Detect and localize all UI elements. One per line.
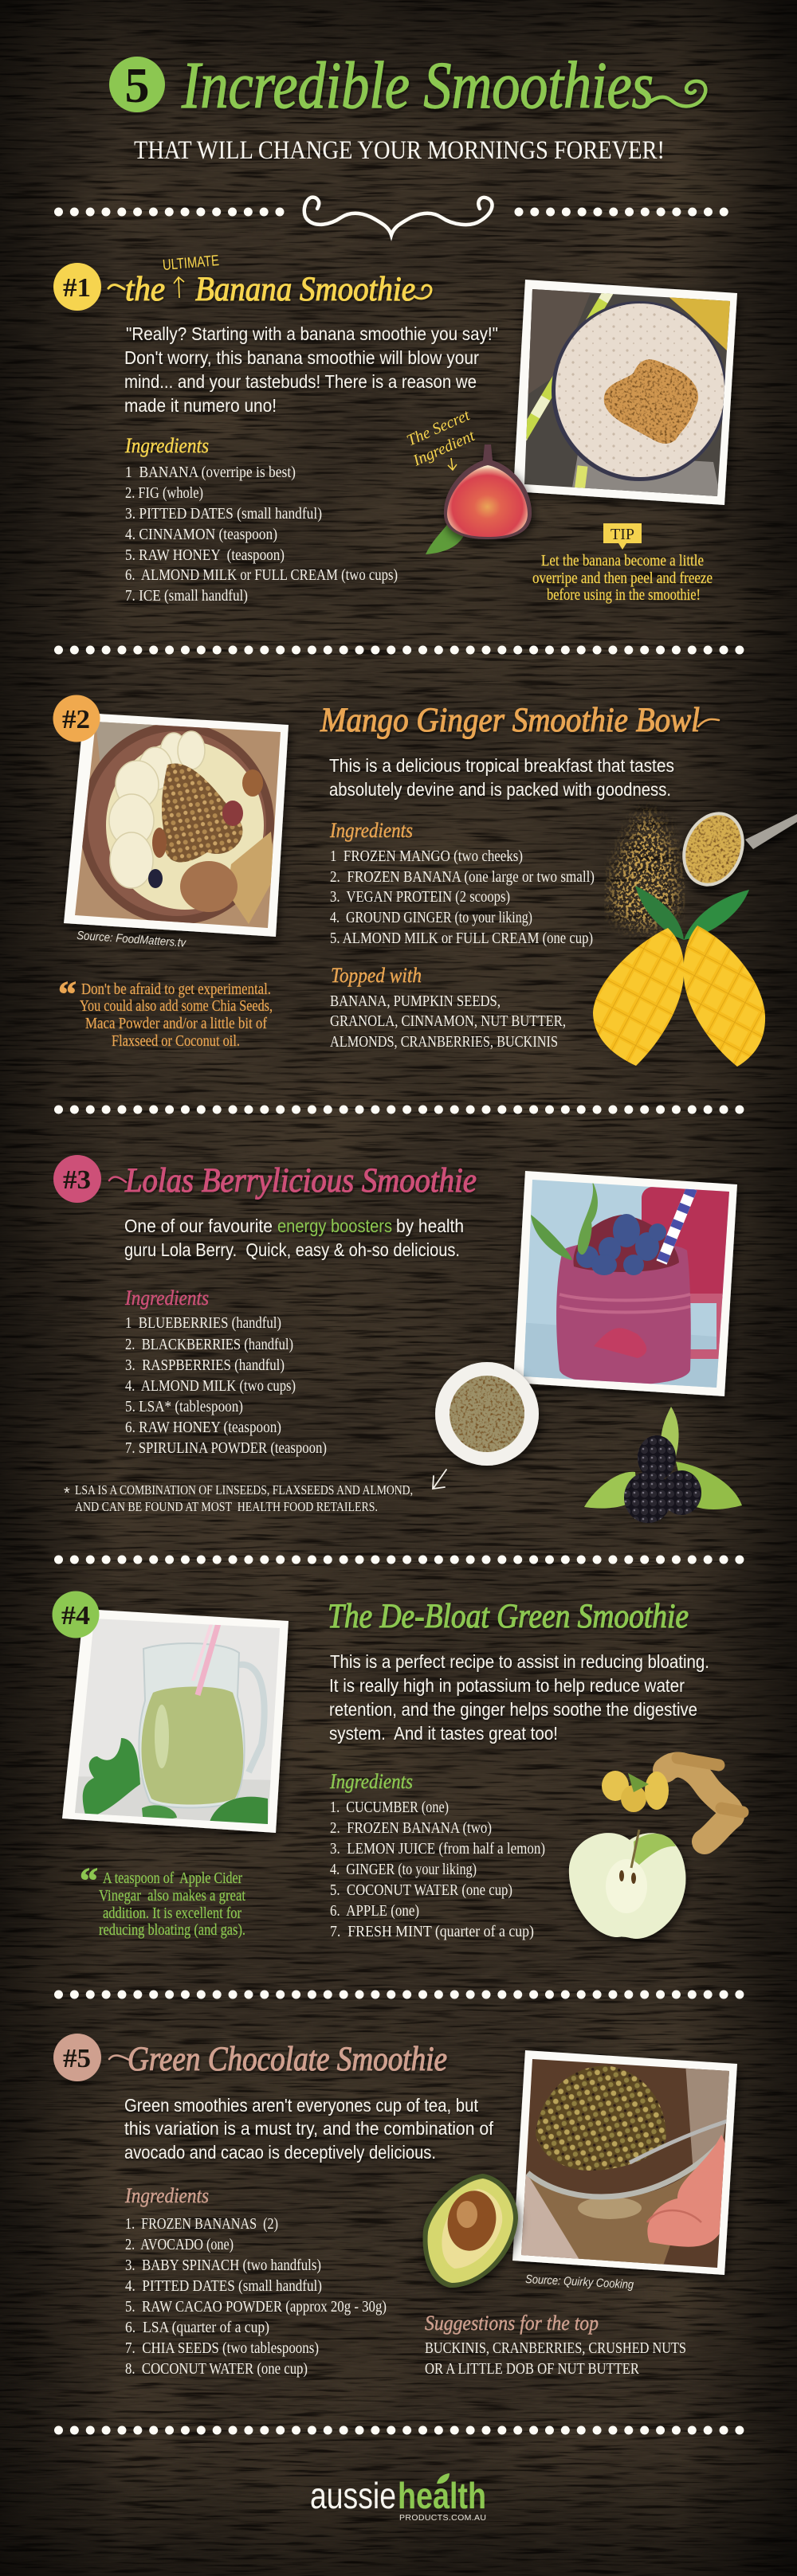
- photo source: Source: FoodMatters.tv: [77, 929, 187, 950]
- ingredients list: 3. BABY SPINACH (two handfuls): [125, 2257, 321, 2274]
- icon: avocado half: [423, 2174, 518, 2288]
- LSA footnote: *: [64, 1485, 70, 1502]
- ingredients list: 4. GINGER (to your liking): [330, 1861, 477, 1878]
- ingredients list: 2. FROZEN BANANA (one large or two small): [330, 868, 595, 886]
- ingredients heading: Ingredients: [124, 2184, 209, 2207]
- suggestions heading: Suggestions for the top: [425, 2312, 599, 2335]
- logo: aussie health products: aussie: [310, 2475, 396, 2516]
- icon: spoon of ginger powder: [672, 803, 797, 895]
- quote tip: “: [58, 973, 77, 1014]
- number badge 5: #5: [63, 2044, 91, 2073]
- ingredients list: 4. CINNAMON (teaspoon): [125, 526, 277, 543]
- toppings list: [330, 992, 566, 1051]
- logo: aussie health products: health: [398, 2475, 486, 2516]
- intro text: [124, 2095, 494, 2163]
- LSA footnote: LSA IS A COMBINATION OF LINSEEDS, FLAXSEEDS AND ALMOND,: [75, 1482, 413, 1497]
- ingredients list: 3. LEMON JUICE (from half a lemon): [330, 1840, 545, 1858]
- quote tip: You could also add some Chia Seeds,: [80, 997, 273, 1015]
- panel: smoothie 1 banana: [53, 253, 737, 605]
- tip text: Let the banana become a little: [541, 552, 704, 570]
- panel: smoothie 4 green: [53, 1591, 743, 1940]
- number badge 5: [53, 2034, 101, 2081]
- ingredients heading: Ingredients: [329, 1770, 413, 1793]
- number badge 1: #1: [63, 273, 91, 303]
- ingredients list: 1. FROZEN BANANAS (2): [125, 2215, 278, 2233]
- photo source: Source: Quirky Cooking: [525, 2273, 634, 2292]
- number badge 2: [53, 695, 100, 742]
- ingredients list: 5. LSA* (tablespoon): [125, 1398, 243, 1415]
- heading berry: Lolas Berrylicious Smoothie: [124, 1162, 477, 1200]
- ingredients list: 3. VEGAN PROTEIN (2 scoops): [330, 888, 510, 906]
- suggestions text: BUCKINIS, CRANBERRIES, CRUSHED NUTS: [425, 2339, 686, 2357]
- ingredients list: 1. CUCUMBER (one): [330, 1799, 449, 1816]
- icon: apple half: [569, 1830, 685, 1939]
- icon: ginger root and slices: [602, 1758, 743, 1842]
- ingredients list: 8. COCONUT WATER (one cup): [125, 2360, 308, 2378]
- intro text: Green smoothies aren't everyones cup of tea, but: [124, 2095, 479, 2116]
- topped with heading: Topped with: [331, 964, 422, 987]
- ingredients list: [125, 464, 398, 605]
- icon: bowl of LSA: [435, 1362, 539, 1466]
- intro text: [124, 1216, 464, 1260]
- heading banana smoothie: Banana Smoothie: [195, 271, 415, 308]
- intro text: guru Lola Berry. Quick, easy & oh-so delicious.: [124, 1239, 460, 1260]
- ingredients list: [330, 848, 595, 947]
- number badge 5: [109, 57, 165, 113]
- heading chocolate smoothie: Green Chocolate Smoothie: [128, 2041, 447, 2078]
- tip text: before using in the smoothie!: [547, 586, 701, 604]
- quote tip: Maca Powder and/or a little bit of: [85, 1015, 267, 1032]
- number badge 1: [53, 263, 101, 311]
- intro text: One of our favourite: [124, 1216, 273, 1236]
- ingredients list: 5. RAW HONEY (teaspoon): [125, 546, 285, 564]
- intro text: this variation is a must try, and the combination of: [124, 2118, 494, 2139]
- ingredients list: 5. RAW CACAO POWDER (approx 20g - 30g): [125, 2298, 387, 2316]
- subtitle: THAT WILL CHANGE YOUR MORNINGS FOREVER!: [134, 136, 665, 165]
- header: [109, 49, 705, 165]
- ingredients list: 1 BLUEBERRIES (handful): [125, 1314, 281, 1332]
- quote tip: Vinegar also makes a great: [99, 1887, 245, 1905]
- ingredients list: [125, 2215, 387, 2378]
- ingredients list: 5. ALMOND MILK or FULL CREAM (one cup): [330, 930, 593, 947]
- number badge 5: 5: [124, 59, 150, 113]
- ingredients list: 7. FRESH MINT (quarter of a cup): [330, 1923, 534, 1940]
- intro text: mind... and your tastebuds! There is a reason we: [124, 371, 477, 392]
- intro text: by health: [396, 1216, 464, 1236]
- tip badge: TIP: [611, 526, 634, 543]
- ingredients list: 6. RAW HONEY (teaspoon): [125, 1419, 281, 1436]
- ingredients list: 5. COCONUT WATER (one cup): [330, 1881, 512, 1899]
- intro text: absolutely devine and is packed with goodness.: [329, 779, 671, 800]
- number badge 2: #2: [62, 705, 90, 734]
- intro text: avocado and cacao is deceptively delicious.: [124, 2142, 436, 2163]
- photo: banana smoothie: [513, 280, 737, 505]
- intro text: [124, 323, 498, 416]
- quote tip: Flaxseed or Coconut oil.: [112, 1032, 240, 1050]
- ingredients list: 7. ICE (small handful): [125, 587, 248, 605]
- logo: aussie health products: [310, 2473, 486, 2523]
- ingredients list: 3. RASPBERRIES (handful): [125, 1357, 285, 1374]
- panel: smoothie 2 mango: [53, 695, 797, 1071]
- ingredients list: 4. PITTED DATES (small handful): [125, 2277, 322, 2295]
- heading banana smoothie: [108, 253, 431, 308]
- ingredients list: 4. GROUND GINGER (to your liking): [330, 909, 532, 926]
- quote tip: [58, 973, 273, 1050]
- number badge 4: [53, 1591, 99, 1638]
- heading banana smoothie: ULTIMATE: [162, 253, 220, 274]
- toppings list: BANANA, PUMPKIN SEEDS,: [330, 992, 501, 1010]
- intro text: system. And it tastes great too!: [329, 1723, 558, 1744]
- heading banana smoothie: the: [125, 271, 165, 308]
- photo: berry smoothie jar: [513, 1171, 737, 1402]
- ingredients list: 1 BANANA (overripe is best): [125, 464, 296, 481]
- panel: smoothie 3 berry: [53, 1155, 742, 1523]
- suggestions text: OR A LITTLE DOB OF NUT BUTTER: [425, 2360, 640, 2378]
- tip text: [532, 552, 713, 604]
- icon: ginger powder scatter: [611, 812, 678, 928]
- suggestions text: [425, 2339, 686, 2378]
- ingredients list: 7. CHIA SEEDS (two tablespoons): [125, 2339, 319, 2357]
- number badge 3: [53, 1155, 101, 1203]
- ingredients list: 3. PITTED DATES (small handful): [125, 505, 322, 523]
- icon: mango halves: [593, 886, 765, 1067]
- note: the secret ingredient: The Secret: [404, 406, 473, 450]
- tip text: overripe and then peel and freeze: [532, 570, 713, 587]
- intro text: This is a delicious tropical breakfast that tastes: [329, 755, 674, 776]
- ingredients list: 6. LSA (quarter of a cup): [125, 2319, 269, 2336]
- intro text: [329, 755, 674, 800]
- intro text: It is really high in potassium to help reduce water: [329, 1675, 685, 1696]
- ingredients heading: Ingredients: [329, 819, 413, 842]
- ingredients heading: Ingredients: [124, 1286, 209, 1310]
- number badge 4: #4: [61, 1601, 90, 1631]
- tip badge: [603, 523, 642, 550]
- panel: smoothie 5 chocolate: [53, 2034, 737, 2378]
- ingredients list: 1 FROZEN MANGO (two cheeks): [330, 848, 523, 865]
- intro text: This is a perfect recipe to assist in reducing bloating.: [330, 1651, 709, 1672]
- photo: smoothie bowl: [64, 713, 289, 937]
- intro text: energy boosters: [277, 1216, 392, 1236]
- quote tip: A teaspoon of Apple Cider: [103, 1869, 242, 1887]
- ingredients list: [330, 1799, 545, 1940]
- heading mango: Mango Ginger Smoothie Bowl: [320, 702, 700, 739]
- quote tip: reducing bloating (and gas).: [99, 1921, 245, 1939]
- photo: chocolate smoothie glass: [512, 2050, 737, 2275]
- ingredients list: 6. APPLE (one): [330, 1902, 419, 1920]
- intro text: Don't worry, this banana smoothie will blow your: [124, 347, 479, 368]
- icon: fig with leaf: [426, 444, 532, 554]
- heading green smoothie: The De-Bloat Green Smoothie: [328, 1598, 689, 1635]
- intro text: "Really? Starting with a banana smoothie you say!": [126, 323, 498, 344]
- main title: Incredible Smoothies: [181, 49, 654, 123]
- ingredients list: [125, 1314, 327, 1457]
- note: the secret ingredient: [404, 406, 477, 470]
- ingredients heading: Ingredients: [124, 434, 209, 457]
- quote tip: “: [80, 1860, 98, 1901]
- ingredients list: 4. ALMOND MILK (two cups): [125, 1377, 296, 1395]
- ingredients list: 2. FIG (whole): [125, 484, 203, 502]
- quote tip: [80, 1860, 245, 1939]
- toppings list: GRANOLA, CINNAMON, NUT BUTTER,: [330, 1012, 566, 1030]
- ingredients list: 2. AVOCADO (one): [125, 2236, 234, 2253]
- arrow to bowl: [433, 1470, 446, 1489]
- photo: green smoothie jug: [62, 1609, 289, 1833]
- intro text: retention, and the ginger helps soothe the digestive: [329, 1699, 697, 1720]
- ingredients list: 2. BLACKBERRIES (handful): [125, 1336, 293, 1353]
- LSA footnote: [64, 1482, 413, 1514]
- intro text: [329, 1651, 709, 1744]
- intro text: made it numero uno!: [124, 395, 277, 416]
- LSA footnote: AND CAN BE FOUND AT MOST HEALTH FOOD RETAILERS.: [75, 1499, 378, 1514]
- ingredients list: 7. SPIRULINA POWDER (teaspoon): [125, 1439, 327, 1457]
- logo: aussie health products: PRODUCTS.COM.AU: [399, 2513, 486, 2523]
- number badge 3: #3: [63, 1165, 91, 1195]
- quote tip: addition. It is excellent for: [103, 1905, 241, 1922]
- ingredients list: 6. ALMOND MILK or FULL CREAM (two cups): [125, 566, 398, 584]
- note: the secret ingredient: Ingredient: [410, 427, 477, 470]
- quote tip: Don't be afraid to get experimental.: [81, 981, 271, 998]
- ingredients list: 2. FROZEN BANANA (two): [330, 1819, 492, 1837]
- toppings list: ALMONDS, CRANBERRIES, BUCKINIS: [330, 1033, 558, 1051]
- icon: blackberries with leaves: [584, 1407, 742, 1523]
